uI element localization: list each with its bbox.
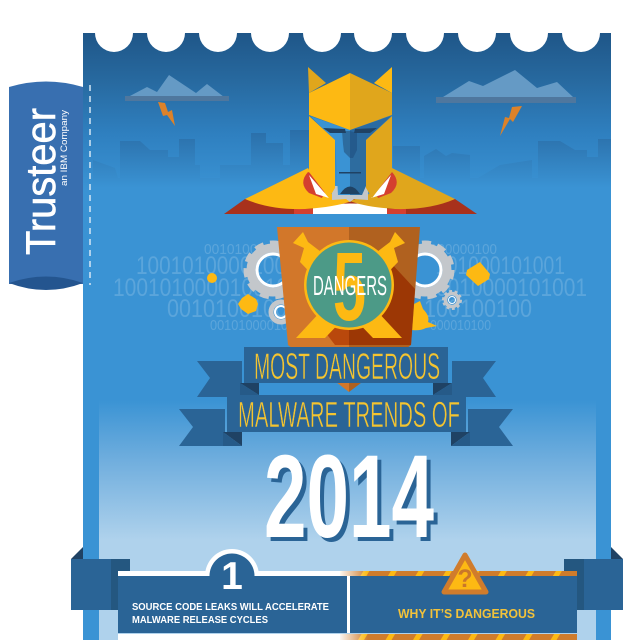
panel heading: MALWARE RELEASE CYCLES — [132, 614, 268, 626]
cape right — [350, 168, 455, 209]
shield emblem — [277, 227, 420, 392]
poster background — [83, 33, 611, 640]
hazard stripes — [338, 571, 577, 640]
binary code pattern left — [113, 241, 288, 334]
helmet right — [350, 73, 392, 130]
ribbon fold right — [564, 547, 623, 610]
logo text: Trusteer — [17, 108, 64, 255]
binary code pattern right: 101000101001 — [436, 252, 565, 280]
title line 2: MALWARE TRENDS OF — [238, 394, 460, 435]
icon: small gear right — [443, 291, 461, 309]
chin — [340, 186, 360, 194]
cloud left with lightning — [125, 75, 229, 126]
brows and mouth — [323, 128, 346, 133]
panel: why it's dangerous — [338, 555, 577, 640]
binary code pattern left: 00101000100 — [204, 241, 288, 258]
cape left — [245, 168, 352, 209]
face — [310, 116, 350, 195]
year 2014: 2014 — [268, 435, 438, 567]
binary code pattern left: 1001010000100 — [136, 252, 286, 280]
binary code pattern left: 0010100100 — [167, 295, 287, 323]
icon: warning triangle — [444, 555, 486, 593]
panel heading: SOURCE CODE LEAKS WILL ACCELERATE — [132, 601, 329, 613]
binary code pattern left: 100101000010010 — [113, 274, 288, 302]
left cheek guard — [309, 116, 335, 198]
helmet left — [309, 73, 350, 130]
shield shadow — [349, 262, 415, 345]
label dangers: DANGERS — [313, 270, 387, 301]
panel: source code leaks — [118, 549, 348, 640]
binary code pattern right: 000010100 — [430, 317, 491, 334]
city skyline — [93, 130, 611, 190]
binary code pattern right: 0010000101001 — [436, 274, 587, 302]
logo ribbon — [9, 82, 83, 290]
icon: small gear left — [271, 302, 291, 322]
binary code pattern right: 100100100 — [424, 295, 532, 323]
collar — [303, 172, 330, 198]
binary code pattern left: 00101000010 — [210, 317, 288, 334]
icon: lightning left — [158, 102, 175, 126]
big number 5: 5 — [333, 232, 366, 341]
year 2014: 2014 — [264, 431, 434, 563]
title ribbon 2 — [179, 394, 513, 446]
heading: WHY IT’S DANGEROUS — [398, 607, 535, 621]
icon: warning triangle: ? — [457, 565, 473, 593]
year 2014 — [264, 431, 438, 567]
hero figure — [224, 67, 477, 214]
title line 1: MOST DANGEROUS — [254, 346, 440, 387]
medallion — [304, 240, 394, 330]
yellow bug shapes — [207, 262, 490, 330]
panel heading — [132, 601, 329, 626]
binary code pattern right: 100000100 — [430, 241, 497, 258]
right cheek guard — [366, 116, 392, 198]
logo tagline: an IBM Company — [59, 110, 70, 186]
helmet ears — [308, 67, 326, 93]
ribbon fold left — [71, 547, 130, 610]
icon: gear right — [398, 243, 452, 297]
icon: gear left — [246, 243, 300, 297]
title ribbon 1 — [197, 346, 496, 397]
binary code pattern right — [424, 241, 587, 334]
cape red — [224, 199, 477, 214]
scalloped top edge — [95, 14, 600, 52]
cloud right with lightning — [436, 70, 576, 136]
icon: lightning right — [500, 106, 522, 136]
crossed swords — [293, 232, 405, 338]
number 1: 1 — [221, 555, 243, 598]
